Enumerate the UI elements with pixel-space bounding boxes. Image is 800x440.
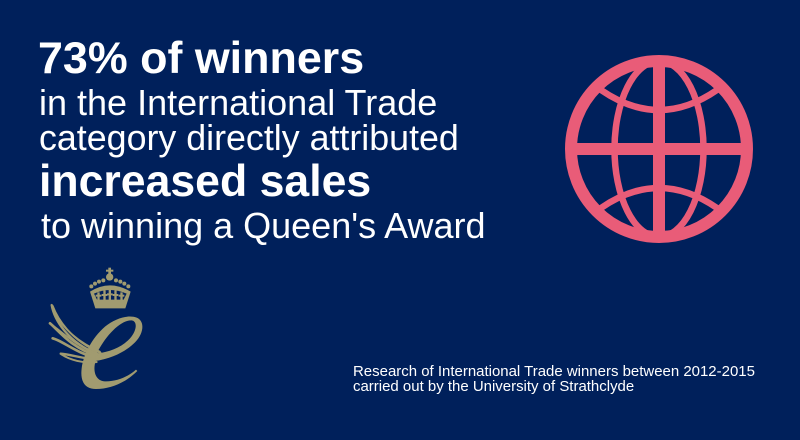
logo crown bbox=[89, 268, 131, 308]
headline: increased sales: increased sales bbox=[39, 157, 371, 206]
text line: in the International Trade: in the International Trade bbox=[39, 82, 437, 123]
footnote: research source: Research of International Trade winners between 2012-2015 bbox=[353, 363, 755, 380]
footnote: research source bbox=[353, 363, 755, 395]
logo letter e bbox=[81, 316, 142, 389]
footnote: research source: carried out by the University of Strathclyde bbox=[353, 378, 634, 395]
headline: 73% of winners: 73% of winners bbox=[38, 33, 364, 83]
text line: to winning a Queen's Award: to winning a Queen's Award bbox=[41, 205, 486, 246]
logo: Queen's Award emblem bbox=[48, 268, 142, 389]
logo wing feathers bbox=[50, 305, 124, 362]
text line: category directly attributed: category directly attributed bbox=[39, 118, 459, 158]
